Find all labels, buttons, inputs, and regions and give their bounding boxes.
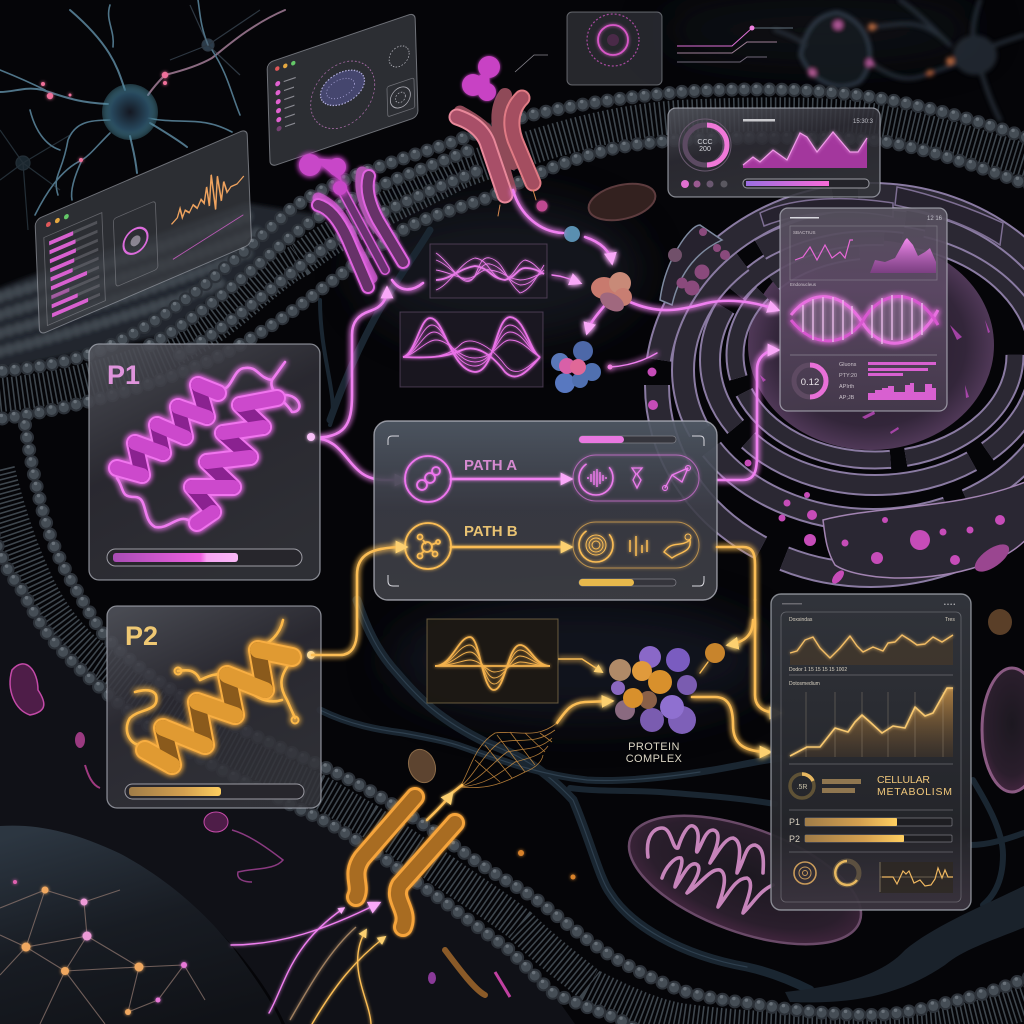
- left channel protein: [299, 154, 403, 287]
- stats panel top right: [668, 108, 880, 197]
- blurred back membrane: [0, 203, 320, 372]
- helix P2: [127, 620, 298, 765]
- ring gauge: 0.12: [801, 377, 819, 388]
- DNA panel: [780, 208, 947, 411]
- window dots: [46, 213, 69, 228]
- orange waveform: [170, 161, 245, 228]
- helix P1: [117, 362, 299, 527]
- P1 progress bar: [107, 549, 302, 566]
- neuron second dim: [170, 5, 260, 75]
- ring gauge: [794, 365, 826, 397]
- DNA helix: [791, 295, 938, 344]
- brain globe: [310, 52, 376, 138]
- P2 progress bar: [125, 784, 304, 799]
- bottom sheet: [823, 480, 1024, 578]
- pink flow arrows: [312, 190, 778, 480]
- left dashboard: [35, 129, 252, 335]
- gauge: [790, 774, 814, 798]
- P2 connector dot: [307, 651, 315, 659]
- path A label: PATH A: [464, 457, 517, 474]
- path A pill: [573, 455, 699, 501]
- main area chart: Dotosmedium: [789, 681, 820, 687]
- funnel wave mesh: [452, 723, 557, 793]
- lower membrane: [0, 422, 1024, 1024]
- top line chart: Doxsindas: [789, 617, 813, 623]
- path A progress: [579, 436, 676, 443]
- cristae: [647, 826, 773, 913]
- nucleus: [748, 240, 994, 450]
- P1 bar: [789, 817, 952, 827]
- neuron soma: [102, 84, 158, 140]
- upper right sheet: [895, 187, 1003, 245]
- bottom left cell with network: [0, 826, 285, 1024]
- line chart: [793, 230, 853, 260]
- orange channel protein: [356, 793, 455, 927]
- small labels: [839, 362, 857, 401]
- pink organelles in lower left: [10, 664, 510, 997]
- menu dots: [275, 80, 282, 132]
- top line chart: [789, 617, 955, 675]
- P2 bar: P2: [789, 834, 800, 844]
- cytoskeleton strands: [320, 230, 1024, 990]
- ring icon: [123, 224, 148, 258]
- bottom incoming arrows: [231, 903, 385, 1024]
- panel P2: [107, 606, 321, 808]
- network nodes: [13, 880, 187, 1015]
- orange ball: [705, 643, 725, 663]
- brain dashboard: [267, 13, 418, 167]
- path B arrow: [451, 546, 571, 548]
- path A node: [405, 456, 451, 502]
- top line chart: Dodor 1 15 15 15 15 1002: [789, 667, 847, 673]
- ambient glow: [360, 0, 980, 720]
- ring gauge: CCC: [697, 139, 713, 146]
- upper membrane: [0, 86, 1024, 420]
- small labels: PTY:20: [839, 373, 857, 379]
- path B label: PATH B: [464, 523, 518, 540]
- side gauges: [386, 42, 415, 117]
- vesicle oval top: [585, 178, 659, 226]
- bars: [868, 362, 936, 376]
- P1 bar: P1: [789, 817, 800, 827]
- left arm sheet: [660, 225, 722, 305]
- gauge: .5R: [797, 784, 807, 791]
- line chart: SBACTIUS: [793, 230, 816, 235]
- orange wave panel: [427, 619, 558, 703]
- P2 label: P2: [125, 621, 158, 651]
- upper left sheet: [760, 199, 893, 226]
- mitochondrion: [613, 789, 877, 971]
- path B pill: [573, 522, 699, 568]
- upper waves panel: [430, 244, 547, 298]
- lower waves panel: [400, 312, 543, 387]
- section label: Endonucleus: [790, 282, 817, 287]
- small labels: Gluons: [839, 362, 857, 368]
- P1 label: P1: [107, 360, 140, 390]
- menu lines: [284, 77, 297, 127]
- brain: [320, 64, 365, 111]
- gauge bars: [822, 779, 861, 793]
- area chart: 15:30:3: [853, 119, 874, 125]
- blue pink cluster: [551, 341, 601, 393]
- dark tissue left: [0, 540, 575, 1024]
- connector lines: [677, 26, 793, 62]
- metabolism panel: • • • •: [944, 602, 955, 608]
- synapse glows: [41, 72, 168, 162]
- path B progress: [579, 579, 676, 586]
- main area chart: [789, 681, 953, 764]
- DNA panel: 12 16: [927, 216, 943, 222]
- top channel protein: [457, 56, 536, 216]
- right mitochondrion: [982, 668, 1024, 792]
- top line chart: Tres: [945, 617, 955, 623]
- protein complex: COMPLEX: [626, 753, 683, 765]
- pink protein cluster: [591, 272, 632, 315]
- P1 connector dot: [307, 433, 315, 441]
- thick tube bottom right: [785, 883, 1024, 1002]
- small molecules: [536, 200, 580, 242]
- protein complex: [609, 643, 725, 765]
- small labels: AP;JB: [839, 395, 855, 401]
- target icon: [794, 862, 816, 884]
- neuron top right cage: [775, 0, 1024, 120]
- vesicles: [648, 228, 1014, 586]
- neuron dim small left: [0, 130, 70, 230]
- ligand top: [462, 56, 500, 101]
- P2 bar: [789, 834, 952, 844]
- orange flow arrows: [312, 547, 780, 752]
- panel paths: [374, 421, 717, 600]
- small oval vesicles: [404, 609, 1012, 995]
- metabolism panel: [771, 594, 971, 910]
- corner brackets: [388, 436, 704, 586]
- bar list: [49, 221, 100, 317]
- small labels: APIrth: [839, 384, 854, 390]
- network links: [0, 890, 205, 1024]
- metabolism label: CELLULAR: [877, 774, 930, 786]
- mini histogram: [868, 383, 936, 400]
- top center panel: [515, 12, 793, 85]
- ring gauge: 200: [699, 146, 711, 153]
- endoplasmic reticulum: [657, 187, 1024, 578]
- spark chart: [880, 862, 953, 893]
- ligand left: [299, 154, 347, 195]
- metabolism panel: METABOLISM: [877, 786, 952, 798]
- area chart: [743, 119, 874, 168]
- ring icon: [835, 861, 859, 885]
- protein complex label: PROTEIN: [628, 741, 680, 753]
- ring gauge: [679, 119, 731, 171]
- neuron top left: [0, 0, 285, 215]
- panel P1: [89, 344, 320, 580]
- status dots: [681, 180, 728, 188]
- path A arrow: [451, 478, 571, 480]
- progress bar: [743, 179, 869, 188]
- path B node: [405, 523, 451, 569]
- filled chart: [870, 238, 936, 273]
